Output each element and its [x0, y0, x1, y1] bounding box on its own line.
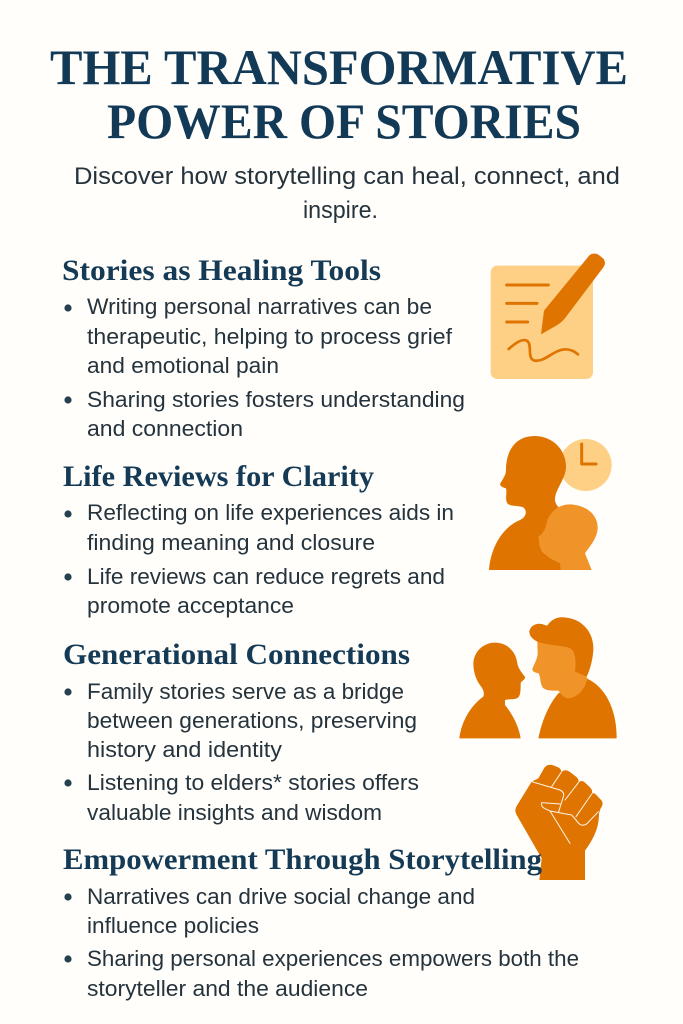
title: THE TRANSFORMATIVE [50, 39, 628, 95]
subtitle: Discover how storytelling can heal, connect, and [74, 163, 620, 190]
section: stories as healing tools: and connection [87, 416, 243, 441]
title: POWER OF STORIES [107, 93, 581, 149]
subtitle: inspire. [303, 197, 378, 224]
section: generational connections: between generations, preserving [87, 708, 417, 733]
title [50, 39, 628, 149]
section: empowerment through storytelling: storyteller and the audience [87, 976, 368, 1001]
subtitle [74, 163, 620, 224]
section: generational connections: Family stories serve as a bridge [87, 679, 404, 704]
section: stories as healing tools: therapeutic, helping to process grief [87, 324, 453, 349]
section: life reviews for clarity: Life reviews can reduce regrets and [87, 564, 445, 589]
section: life reviews for clarity: promote acceptance [87, 593, 294, 618]
section: life reviews for clarity: finding meaning and closure [87, 530, 375, 555]
icon: raised fist [515, 765, 603, 880]
section: stories as healing tools: Sharing stories fosters understanding [87, 387, 465, 412]
section: generational connections: Listening to elders* stories offers [87, 770, 419, 795]
icon: life review silhouettes with clock [489, 436, 612, 570]
section: life reviews for clarity: Reflecting on life experiences aids in [87, 500, 454, 525]
section: empowerment through storytelling: Sharing personal experiences empowers both the [87, 946, 579, 971]
section: empowerment through storytelling: influence policies [87, 913, 259, 938]
section: empowerment through storytelling [63, 843, 579, 1001]
icon: two generations facing each other [459, 617, 617, 738]
section: generational connections: history and identity [87, 737, 282, 762]
section: stories as healing tools: and emotional pain [87, 353, 279, 378]
heading: life reviews for clarity: Life Reviews for Clarity [63, 460, 374, 493]
heading: generational connections: Generational Connections [63, 638, 410, 671]
section: generational connections: valuable insights and wisdom [87, 800, 382, 825]
icon: writing pad and pencil [491, 253, 605, 379]
section: empowerment through storytelling: Narratives can drive social change and [87, 884, 475, 909]
section: stories as healing tools: Writing personal narratives can be [87, 294, 432, 319]
section: stories as healing tools [62, 254, 465, 441]
section: life reviews for clarity [63, 460, 454, 618]
heading: stories as healing tools: Stories as Healing Tools [62, 254, 381, 287]
section: generational connections [63, 638, 419, 825]
heading: empowerment through storytelling: Empowerment Through Storytelling [63, 843, 542, 876]
